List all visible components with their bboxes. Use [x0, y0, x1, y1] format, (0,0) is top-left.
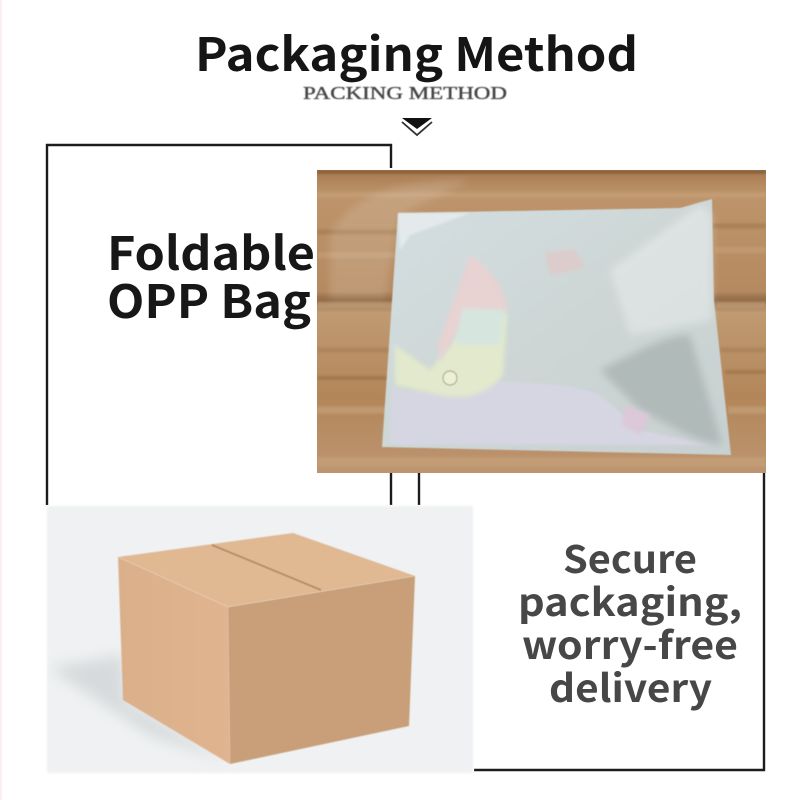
pale green shape: [395, 312, 507, 397]
title: Packaging Method: [195, 19, 638, 85]
panel: foldable OPP bag label: Foldable: [107, 218, 315, 284]
plastic sheen: [330, 180, 470, 300]
panel: foldable OPP bag label: OPP Bag: [107, 266, 311, 332]
subtitle: PACKING METHOD: [303, 83, 507, 103]
panel: secure packaging label: [518, 529, 742, 713]
photo: cardboard box: [47, 506, 473, 773]
left edge tint: [0, 0, 2, 800]
icon: down arrow: [402, 118, 432, 135]
butterfly: [546, 251, 582, 274]
panel: secure packaging label: delivery: [549, 658, 712, 713]
panel: secure packaging label: worry-free: [522, 615, 738, 670]
lavender lower area: [390, 380, 710, 445]
dark grey fold: [600, 335, 722, 445]
wood table: [317, 170, 766, 473]
tape seam: [212, 545, 321, 590]
panel: foldable OPP bag label: [107, 218, 315, 332]
right face: [228, 576, 415, 764]
pink shape: [438, 255, 507, 362]
wrapped package: [382, 199, 731, 455]
panel: secure packaging label: Secure: [563, 529, 697, 584]
top face: [118, 533, 415, 607]
studio backdrop: [47, 506, 473, 773]
flower: [623, 406, 650, 433]
frame lines: [47, 145, 764, 770]
left face: [118, 557, 230, 764]
film glare: [610, 205, 712, 335]
shadow: [57, 654, 204, 752]
aqua shape: [455, 308, 505, 345]
panel: secure packaging label: packaging,: [518, 572, 742, 627]
parrot eye: [443, 371, 457, 385]
photo: OPP bag on wood table: [317, 170, 766, 473]
